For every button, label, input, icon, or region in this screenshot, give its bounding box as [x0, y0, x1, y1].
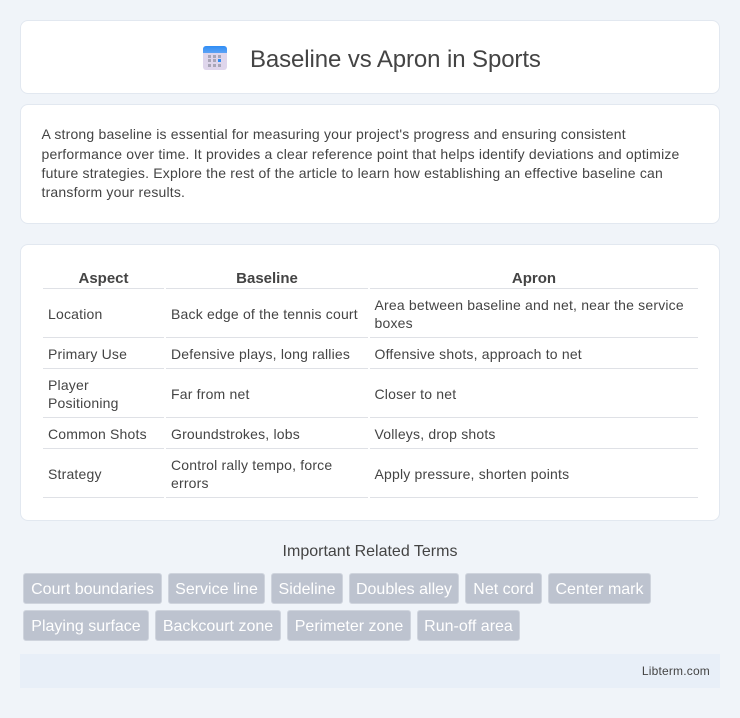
tag: Center mark — [555, 581, 644, 598]
Primary Use apron: Offensive shots, approach to net — [374, 346, 582, 362]
Location apron: boxes — [374, 315, 413, 331]
intro line 2: performance over time. It provides a clear reference point that helps identify deviations and optimize — [42, 146, 680, 162]
tag: Perimeter zone — [295, 618, 403, 635]
footer credit: Libterm.com — [642, 664, 710, 678]
tag: Service line — [175, 581, 258, 598]
tag — [349, 573, 459, 604]
Common Shots baseline: Groundstrokes, lobs — [171, 426, 300, 442]
intro line 1: A strong baseline is essential for measuring your project's progress and ensuring consistent — [42, 126, 626, 142]
row: Player Positioning: Positioning — [48, 395, 119, 411]
tag — [155, 610, 281, 641]
row: Strategy: Strategy — [48, 466, 102, 482]
header card — [20, 20, 720, 94]
tag — [168, 573, 265, 604]
Location apron — [374, 297, 684, 331]
Strategy baseline: Control rally tempo, force — [171, 457, 332, 473]
Player Positioning apron: Closer to net — [374, 386, 456, 402]
tag — [271, 573, 343, 604]
row: Player Positioning — [48, 377, 119, 411]
intro text card — [20, 104, 720, 224]
row: Common Shots: Common Shots — [48, 426, 147, 442]
related terms heading: Important Related Terms — [283, 543, 457, 560]
tag — [465, 573, 542, 604]
Primary Use baseline: Defensive plays, long rallies — [171, 346, 350, 362]
table header: Apron: Apron — [512, 270, 556, 287]
Strategy apron: Apply pressure, shorten points — [374, 466, 569, 482]
tag — [23, 610, 149, 641]
table header: Baseline: Baseline — [236, 270, 298, 287]
tag: Net cord — [473, 581, 534, 598]
tag: Doubles alley — [356, 581, 452, 598]
title: Baseline vs Apron in Sports — [250, 46, 541, 73]
Strategy baseline: errors — [171, 475, 209, 491]
Location baseline: Back edge of the tennis court — [171, 306, 358, 322]
footer bar — [20, 654, 720, 688]
Common Shots apron: Volleys, drop shots — [374, 426, 496, 442]
intro line 3: future strategies. Explore the rest of the article to learn how establishing an effective baseline can — [42, 165, 663, 181]
row: Primary Use: Primary Use — [48, 346, 127, 362]
tag: Backcourt zone — [163, 618, 273, 635]
tag: Court boundaries — [31, 581, 154, 598]
Strategy baseline — [171, 457, 332, 491]
Location apron: Area between baseline and net, near the service — [374, 297, 684, 313]
intro line 4: transform your results. — [42, 184, 185, 200]
tag: Playing surface — [31, 618, 141, 635]
tag: Sideline — [279, 581, 335, 598]
icon: calendar — [203, 46, 227, 70]
row: Location: Location — [48, 306, 102, 322]
tag — [23, 573, 162, 604]
tag — [417, 610, 520, 641]
tag: Run-off area — [424, 618, 513, 635]
table header: Aspect: Aspect — [78, 270, 129, 287]
tag — [287, 610, 411, 641]
tag — [548, 573, 651, 604]
Player Positioning baseline: Far from net — [171, 386, 250, 402]
row: Player Positioning: Player — [48, 377, 89, 393]
table card — [20, 244, 720, 521]
term tags — [23, 573, 651, 641]
